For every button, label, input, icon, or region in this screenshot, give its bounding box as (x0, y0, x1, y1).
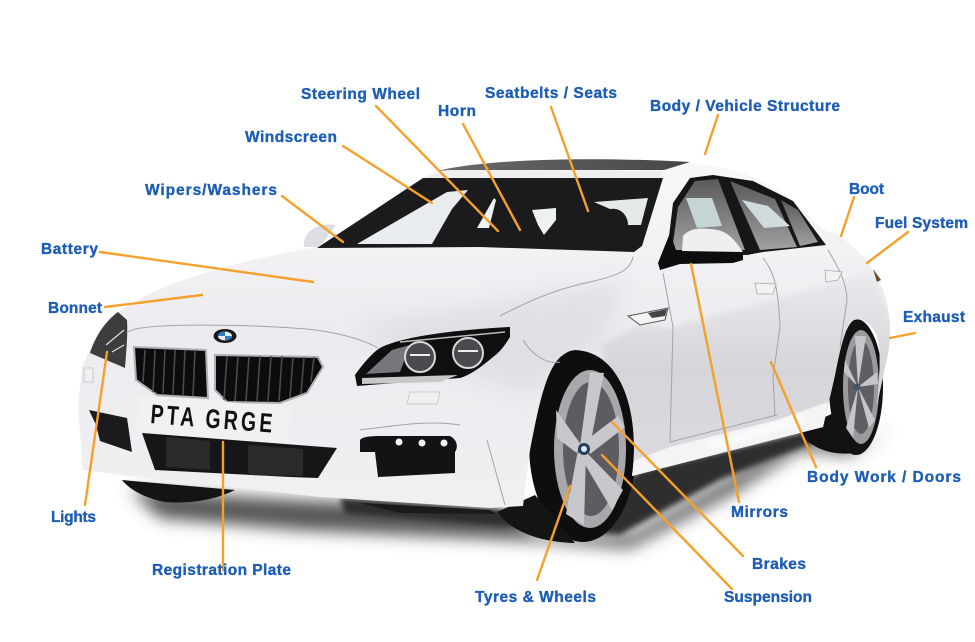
label: Windscreen: Windscreen (245, 129, 337, 146)
callout lines (85, 106, 915, 589)
left headlight (90, 312, 127, 368)
lower intake (142, 433, 337, 478)
right headlight (355, 327, 510, 386)
number plate (137, 395, 290, 444)
label: Body / Vehicle Structure: Body / Vehicle Structure (650, 98, 840, 115)
label: Lights: Lights (51, 509, 96, 526)
side repeater (628, 308, 668, 325)
label: Exhaust: Exhaust (903, 309, 965, 326)
mirror right (658, 229, 743, 270)
label: Brakes: Brakes (752, 556, 806, 573)
label: Body Work / Doors: Body Work / Doors (807, 469, 961, 486)
label: Horn: Horn (438, 103, 476, 120)
front wheel (497, 348, 637, 543)
body (78, 162, 890, 508)
mirror left (304, 224, 336, 247)
label: Steering Wheel: Steering Wheel (301, 86, 420, 103)
right fog light (360, 436, 457, 477)
side windows (667, 175, 826, 255)
washer cover and side marker (84, 368, 440, 404)
label: Mirrors: Mirrors (731, 504, 788, 521)
label: Wipers/Washers: Wipers/Washers (145, 182, 277, 199)
grille (134, 347, 323, 403)
label: Battery: Battery (41, 241, 98, 258)
ground shadow (130, 430, 890, 548)
body shading (380, 282, 890, 476)
rear wheel (797, 319, 883, 455)
badge (214, 329, 236, 343)
label: Bonnet: Bonnet (48, 300, 102, 317)
left fog light (89, 410, 132, 452)
door lines and creases (128, 250, 847, 505)
label: Fuel System: Fuel System (875, 215, 968, 232)
under front tyre (122, 480, 235, 502)
roof (437, 159, 690, 171)
door handles (755, 270, 842, 294)
label: Seatbelts / Seats: Seatbelts / Seats (485, 85, 617, 102)
label: Tyres & Wheels: Tyres & Wheels (475, 589, 596, 606)
number plate: PTA GRGE (150, 399, 277, 439)
car (78, 159, 895, 543)
label: Suspension: Suspension (724, 589, 812, 606)
label: Boot: Boot (849, 181, 884, 198)
label: Registration Plate: Registration Plate (152, 562, 291, 579)
tail light (873, 269, 881, 282)
infographic: car parts diagram (42, 86, 968, 606)
windscreen (317, 178, 663, 252)
